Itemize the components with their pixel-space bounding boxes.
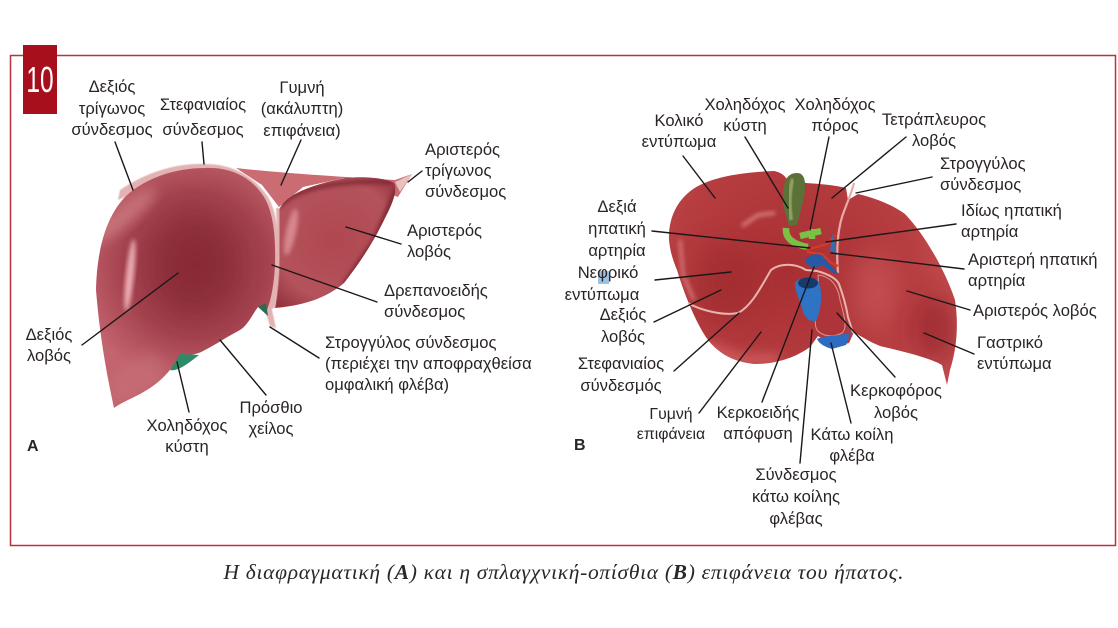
label: quadrate lobe: Τετράπλευρος — [882, 110, 986, 129]
label: bare area: επιφάνεια — [637, 426, 705, 443]
label: bile duct: πόρος — [811, 116, 859, 135]
label lines A — [82, 140, 422, 412]
label: coronary ligament: σύνδεσμος — [162, 120, 244, 139]
label: left lobe: Αριστερός λοβός — [973, 301, 1097, 320]
chapter badge: 10 — [26, 59, 54, 100]
label: inferior vena cava: φλέβα — [829, 446, 875, 465]
label: gallbladder: Χοληδόχος — [146, 416, 228, 435]
label: proper hepatic artery: αρτηρία — [961, 222, 1019, 241]
portal vein — [805, 254, 838, 274]
label: left hepatic artery: Αριστερή ηπατική — [968, 250, 1097, 269]
label: gallbladder: κύστη — [165, 437, 209, 456]
label: inferior vena cava: Κάτω κοίλη — [811, 425, 893, 444]
label: right triangular ligament: τρίγωνος — [79, 99, 145, 118]
label: bile duct: Χοληδόχος — [794, 95, 876, 114]
label: right triangular ligament: σύνδεσμος — [71, 120, 153, 139]
label: gallbladder: Χοληδόχος — [704, 95, 786, 114]
chapter badge — [23, 45, 57, 114]
panel letter B: B — [574, 437, 586, 454]
label: caudate process: Κερκοειδής — [717, 403, 799, 422]
label: left triangular ligament: Αριστερός — [425, 140, 500, 159]
gallbladder — [783, 173, 805, 226]
label: caudate lobe: Κερκοφόρος — [850, 381, 942, 400]
liver illustration B — [669, 171, 957, 385]
label: falciform ligament: Δρεπανοειδής — [384, 281, 488, 300]
coronary ligament line — [688, 265, 853, 333]
label: anterior margin: χείλος — [248, 419, 294, 438]
label: ligament of vena cava: Σύνδεσμος — [755, 465, 837, 484]
label: right lobe: Δεξιός — [600, 305, 646, 324]
label: caudate process: απόφυση — [723, 424, 793, 443]
label: anterior margin: Πρόσθιο — [239, 398, 303, 417]
label: caudate lobe: λοβός — [874, 403, 918, 422]
label: round ligament: (περιέχει την αποφραχθείσα — [325, 354, 532, 373]
label lines B — [652, 137, 974, 463]
label: right hepatic artery: Δεξιά — [597, 197, 637, 216]
liver illustration A — [88, 164, 412, 408]
caudate lobe — [815, 275, 845, 336]
label: right triangular ligament: Δεξιός — [89, 77, 135, 96]
label: falciform ligament: σύνδεσμος — [384, 302, 465, 321]
label: bare area: Γυμνή — [649, 406, 693, 423]
label: round ligament: Στρογγύλος σύνδεσμος — [325, 333, 497, 352]
label: gastric impression: Γαστρικό — [977, 333, 1043, 352]
label: round ligament: Στρογγύλος — [940, 154, 1026, 173]
panel letter A: A — [27, 438, 39, 455]
hepatic arteries — [806, 235, 838, 266]
label: coronary ligament: Στεφανιαίος — [578, 354, 664, 373]
caption: Η διαφραγματική (A) και η σπλαγχνική-οπίσθια (B) επιφάνεια του ήπατος. — [222, 560, 904, 584]
label: round ligament: σύνδεσμος — [940, 175, 1021, 194]
label: quadrate lobe: λοβός — [912, 131, 956, 150]
label: gastric impression: εντύπωμα — [977, 354, 1052, 373]
label: left hepatic artery: αρτηρία — [968, 271, 1026, 290]
label: ligament of vena cava: φλέβας — [769, 509, 823, 528]
label: gallbladder: κύστη — [723, 116, 767, 135]
label: ligament of vena cava: κάτω κοίλης — [752, 487, 840, 506]
falciform fissure — [837, 183, 854, 273]
text selection highlight — [598, 271, 609, 284]
panel A: diaphragmatic surface — [26, 77, 532, 456]
frame — [10, 56, 1116, 546]
label: coronary ligament: Στεφανιαίος — [160, 95, 246, 114]
label: bare area: επιφάνεια) — [263, 121, 341, 140]
inferior vena cava — [795, 278, 821, 321]
label: right hepatic artery: ηπατική — [588, 219, 646, 238]
label: right lobe: λοβός — [601, 327, 645, 346]
label: coronary ligament: σύνδεσμός — [580, 376, 662, 395]
label: right lobe: λοβός — [27, 346, 71, 365]
label: colic impression: εντύπωμα — [642, 132, 717, 151]
label: left lobe: Αριστερός — [407, 221, 482, 240]
label: bare area: (ακάλυπτη) — [261, 99, 343, 118]
bile ducts — [786, 228, 821, 247]
label: proper hepatic artery: Ιδίως ηπατική — [961, 201, 1062, 220]
label: renal impression: Νεφρικό — [578, 263, 638, 282]
label: left triangular ligament: σύνδεσμος — [425, 182, 506, 201]
label: bare area: Γυμνή — [279, 78, 325, 97]
label: right hepatic artery: αρτηρία — [588, 241, 646, 260]
label: renal impression: εντύπωμα — [565, 285, 640, 304]
panel B: visceral surface — [565, 95, 1097, 528]
label: left lobe: λοβός — [407, 242, 451, 261]
label: round ligament: ομφαλική φλέβα) — [325, 375, 449, 394]
label: right lobe: Δεξιός — [26, 325, 72, 344]
label: left triangular ligament: τρίγωνος — [425, 161, 491, 180]
label: colic impression: Κολικό — [654, 111, 704, 130]
